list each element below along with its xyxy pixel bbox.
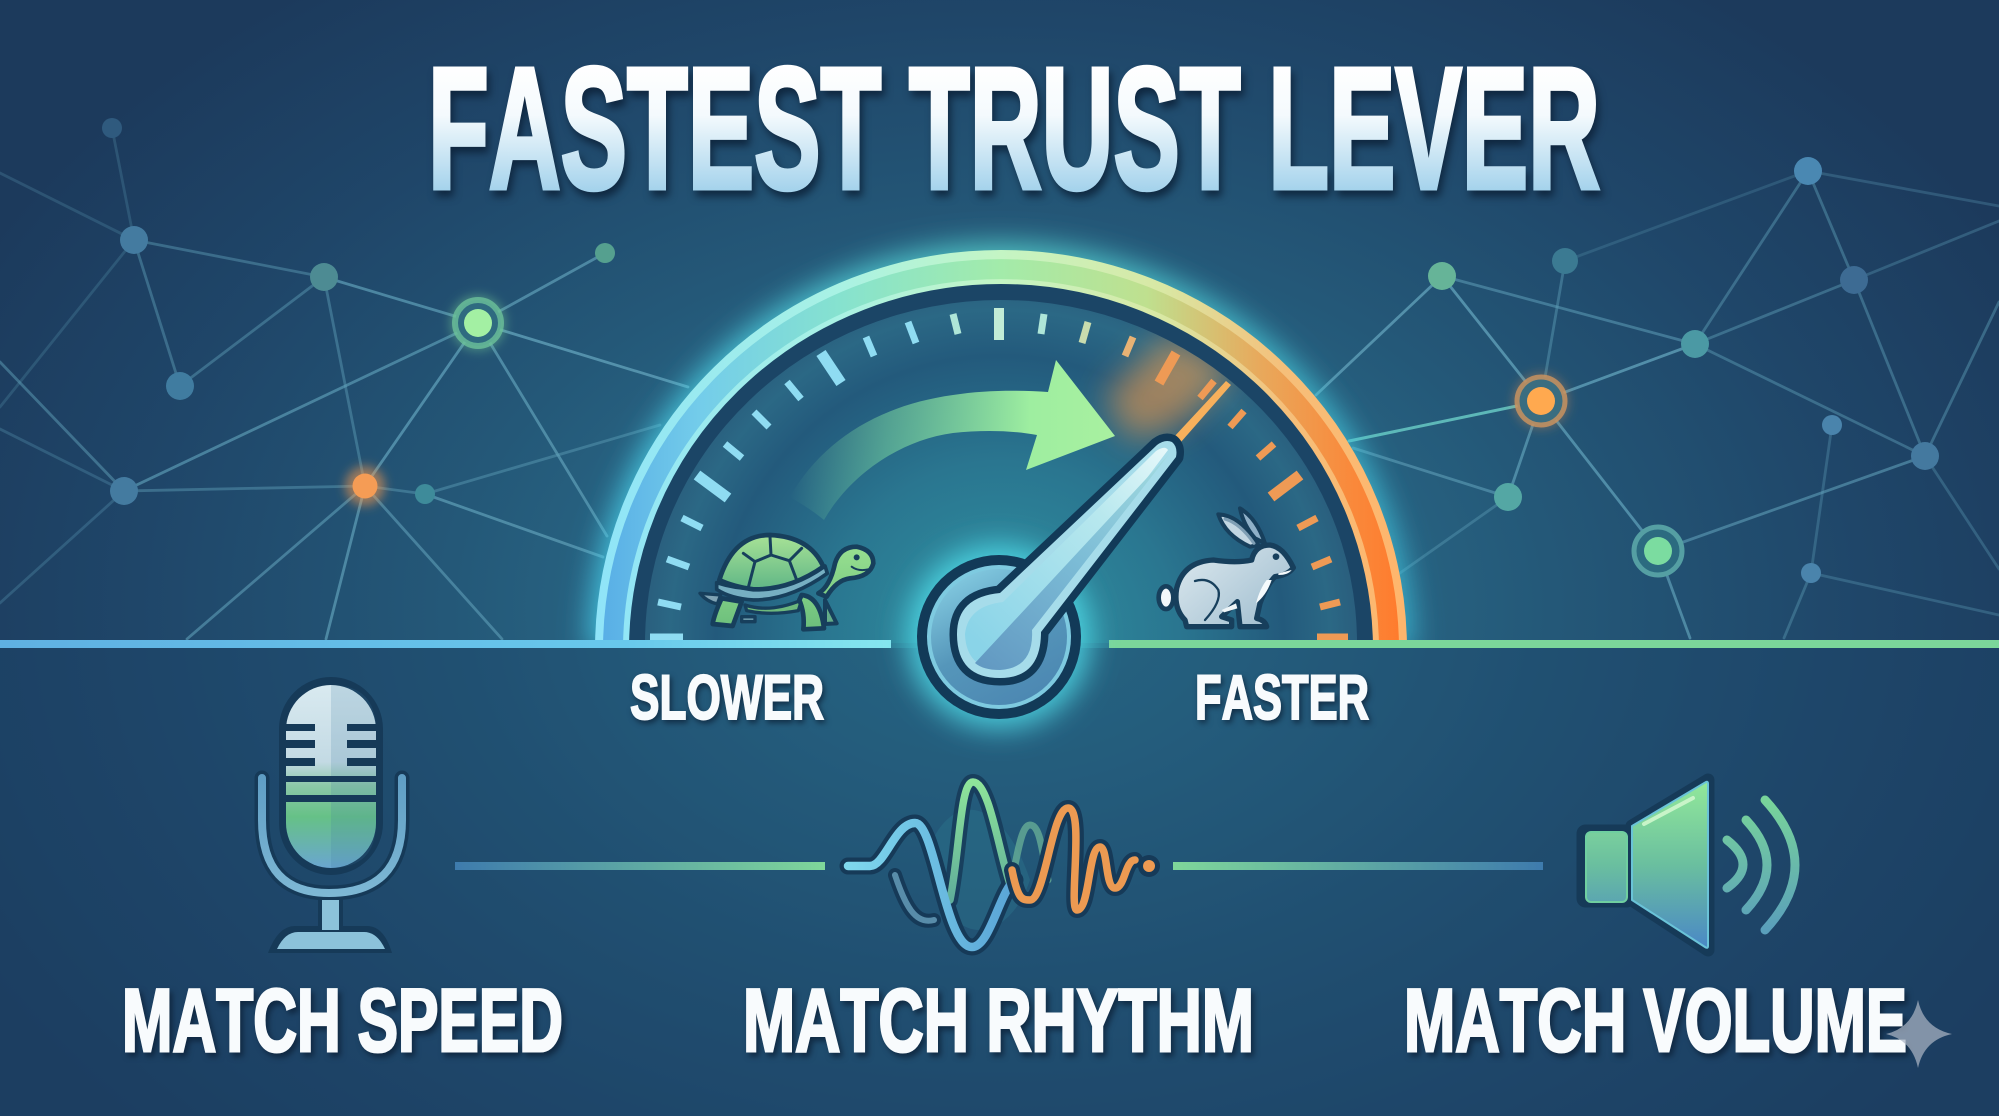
label: match rhythm: MATCH RHYTHM bbox=[743, 970, 1254, 1070]
gauge colour arc bbox=[612, 267, 1390, 650]
label: faster: FASTER bbox=[1195, 663, 1369, 733]
left network pattern bbox=[0, 118, 688, 639]
horizon line left: slower side bbox=[0, 640, 891, 648]
gauge needle and hub bbox=[907, 441, 1176, 729]
icon: rabbit bbox=[1159, 508, 1293, 627]
hub glow bbox=[907, 545, 1091, 729]
orange speed haze bbox=[1105, 335, 1235, 440]
icon: turtle bbox=[700, 535, 873, 629]
icon: speaker bbox=[1582, 780, 1795, 950]
label: slower: SLOWER bbox=[630, 663, 824, 733]
gauge dial face bbox=[627, 283, 1375, 643]
needle bbox=[957, 441, 1176, 678]
icon: sound wave bbox=[848, 782, 1160, 947]
horizon line right: faster side bbox=[1109, 640, 1999, 648]
orange speed beam bbox=[1173, 381, 1231, 442]
icon: sparkle watermark bbox=[1886, 1000, 1952, 1068]
connector right bbox=[1173, 862, 1543, 870]
right network pattern bbox=[1316, 157, 1999, 638]
icon: microphone bbox=[262, 677, 402, 953]
gauge outer glow bbox=[612, 267, 1390, 650]
hub ring bbox=[917, 555, 1081, 719]
connector left bbox=[455, 862, 825, 870]
gauge bbox=[612, 267, 1390, 650]
green speed arrow bbox=[790, 360, 1115, 520]
gauge ticks bbox=[650, 308, 1348, 637]
label: match speed: MATCH SPEED bbox=[122, 970, 563, 1070]
